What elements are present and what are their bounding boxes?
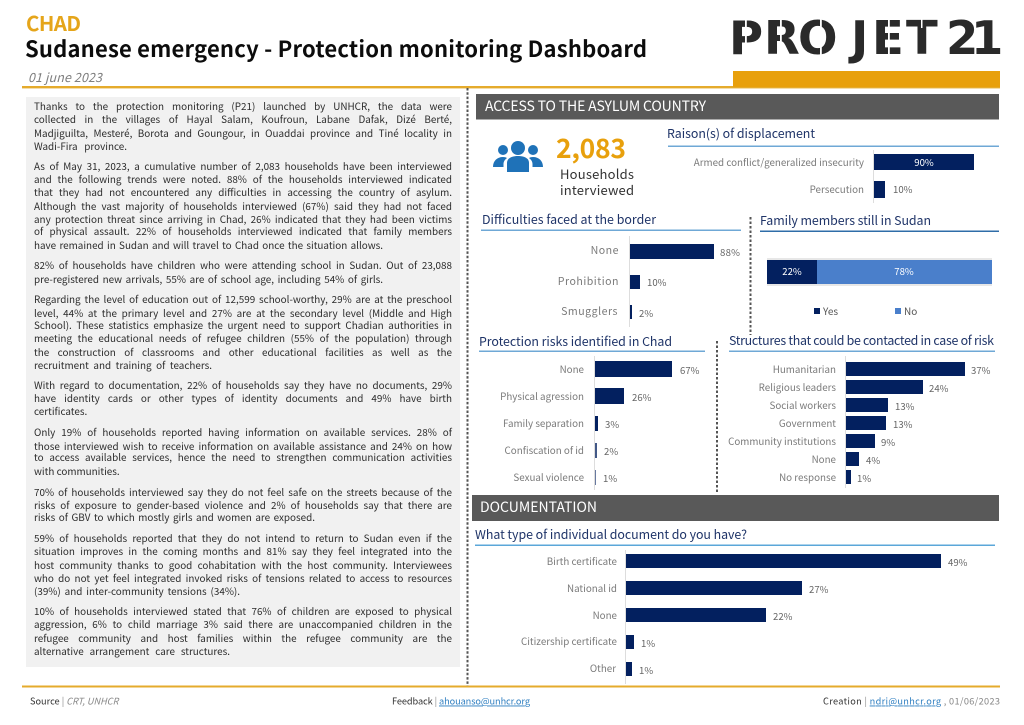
paragraph: education level: meeting the educational needs of refugee children (55% of the population) through bbox=[34, 331, 452, 345]
chart: family members still in Sudan: 78% bbox=[894, 264, 914, 278]
paragraph: cumulative trends: and the following trends were noted. 88% of the households interviewed indicated bbox=[34, 172, 452, 186]
chart: difficulties faced at the border: 88% bbox=[720, 245, 740, 259]
chart: individual documents: Citizership certificate bbox=[521, 634, 618, 648]
chart: reasons for displacement: Armed conflict/generalized insecurity bbox=[694, 155, 864, 169]
paragraph: information on services: with communities. bbox=[34, 464, 120, 478]
chart: reasons for displacement bbox=[667, 124, 999, 203]
chart: individual documents: 22% bbox=[773, 609, 793, 623]
chart title: Difficulties faced at the border bbox=[482, 210, 656, 228]
paragraph: cumulative trends: any protection threat since arriving in Chad, 26% indicated that they had been victims bbox=[34, 212, 452, 226]
paragraph: school attendance: 82% of households have children who were attending school in Sudan. Out of 23,088 bbox=[34, 258, 452, 272]
paragraph: documentation: With regard to documentation, 22% of households say they have no documents, 29% bbox=[34, 378, 452, 392]
paragraph: documentation: certificates. bbox=[34, 404, 87, 418]
chart: protection risks identified in Chad: 26% bbox=[632, 390, 652, 404]
chart: structures that could be contacted in case of risk: No response bbox=[779, 470, 837, 484]
chart title: What type of individual document do you have? bbox=[475, 525, 747, 543]
chart: structures that could be contacted in case of risk: None bbox=[812, 452, 837, 466]
chart title: Raison(s) of displacement bbox=[667, 124, 815, 142]
paragraph: cumulative trends: Although the vast majority of households interviewed (67%) said they had not faced bbox=[34, 199, 452, 213]
paragraph: introduction bbox=[34, 99, 452, 153]
chart: difficulties faced at the border: Prohibition bbox=[558, 274, 619, 289]
key figure: households interviewed bbox=[556, 127, 634, 199]
title block bbox=[25, 7, 647, 86]
footer: feedback: Feedback | ahouanso@unhcr.org bbox=[392, 694, 531, 708]
paragraph: safety: risks of GBV to which mostly girls and women are exposed. bbox=[34, 510, 315, 524]
chart: difficulties faced at the border: Smugglers bbox=[561, 304, 618, 319]
paragraph: cumulative trends: As of May 31, 2023, a cumulative number of 2,083 households have been interviewed bbox=[34, 159, 452, 173]
paragraph: return intentions: situation improves in the coming months and 81% say they feel integrated into the bbox=[34, 544, 452, 558]
chart: individual documents: 27% bbox=[809, 582, 829, 596]
section header: access to the asylum country: ACCESS TO THE ASYLUM COUNTRY bbox=[485, 96, 707, 116]
chart: structures that could be contacted in case of risk: 1% bbox=[857, 471, 871, 485]
footer: creation: Creation | ndri@unhcr.org , 01/06/2023 bbox=[823, 694, 1000, 708]
chart: protection risks identified in Chad: 3% bbox=[605, 417, 619, 431]
paragraph: safety: 70% of households interviewed say they do not feel safe on the streets because of the bbox=[34, 485, 452, 499]
chart: protection risks identified in Chad: None bbox=[560, 362, 585, 376]
chart title: Family members still in Sudan bbox=[760, 211, 931, 229]
key figure: households interviewed: Households bbox=[560, 164, 634, 183]
chart: reasons for displacement: 10% bbox=[893, 182, 913, 196]
chart: structures that could be contacted in case of risk: 13% bbox=[895, 399, 915, 413]
key figure: households interviewed: interviewed bbox=[560, 180, 634, 199]
section header: documentation: DOCUMENTATION bbox=[480, 497, 597, 517]
paragraph: cumulative trends: have remained in Sudan and will travel to Chad once the situation allows. bbox=[34, 238, 383, 252]
country heading: CHAD bbox=[26, 7, 81, 37]
chart: individual documents: National id bbox=[567, 581, 617, 595]
paragraph: information on services: Only 19% of households reported having information on available services. 28% of bbox=[34, 425, 452, 439]
paragraph: cumulative trends bbox=[34, 159, 452, 252]
chart: structures that could be contacted in case of risk: 24% bbox=[929, 381, 949, 395]
paragraph: information on services: those interviewed wish to receive information on available assistance and 24% on how bbox=[34, 439, 452, 453]
icon: group of people bbox=[493, 141, 543, 172]
chart: family members still in Sudan bbox=[760, 211, 999, 318]
chart: structures that could be contacted in case of risk: 13% bbox=[893, 417, 913, 431]
paragraph: return intentions: (39%) and inter-community tensions (34%). bbox=[34, 584, 240, 598]
chart title: Structures that could be contacted in case of risk bbox=[729, 331, 994, 349]
footer: source: Source | CRT, UNHCR bbox=[30, 694, 120, 708]
date: 01 june 2023 bbox=[28, 67, 103, 86]
chart: protection risks identified in Chad: 67% bbox=[680, 363, 700, 377]
chart: structures that could be contacted in case of risk: Community institutions bbox=[728, 434, 836, 448]
paragraph: education level bbox=[34, 292, 452, 372]
chart: family members still in Sudan: 22% bbox=[782, 264, 802, 278]
paragraph: return intentions: 59% of households reported that they do not intend to return to Sudan even if the bbox=[34, 531, 452, 545]
chart: individual documents: 1% bbox=[641, 636, 655, 650]
paragraph: introduction: Madjiguilta, Mesteré, Borota and Goungour, in Ouaddai province and Tiné locality in bbox=[34, 126, 452, 140]
orange accent bar bbox=[733, 71, 1000, 87]
chart: individual documents bbox=[475, 525, 995, 684]
paragraph: children: alternative arrangement care structures. bbox=[34, 644, 230, 658]
paragraph: education level: level, 44% at the primary level and 27% are at the secondary level (Middle and High bbox=[34, 306, 452, 320]
paragraph: children: refugee community and host families within the refugee community are the bbox=[34, 631, 452, 645]
paragraph: return intentions bbox=[34, 531, 452, 598]
chart: individual documents: Other bbox=[590, 661, 616, 675]
paragraph: information on services: to access available services, hence the need to strengthen communication activities bbox=[34, 450, 452, 464]
paragraph: education level: Regarding the level of education out of 12,599 school-worthy, 29% are at the preschool bbox=[34, 292, 452, 306]
paragraph: documentation: have identity cards or other types of identity documents and 49% have birth bbox=[34, 391, 452, 405]
chart: structures that could be contacted in case of risk: Social workers bbox=[769, 398, 836, 412]
chart: protection risks identified in Chad: Family separation bbox=[503, 416, 584, 430]
paragraph: education level: the construction of classrooms and other educational facilities as well as the bbox=[34, 345, 452, 359]
chart: protection risks identified in Chad: Confiscation of id bbox=[505, 443, 584, 457]
chart: difficulties faced at the border: None bbox=[591, 243, 619, 258]
paragraph: information on services bbox=[34, 425, 452, 478]
paragraph: introduction: Thanks to the protection monitoring (P21) launched by UNHCR, the data were bbox=[34, 99, 452, 113]
legend: No bbox=[904, 303, 917, 318]
chart: structures that could be contacted in case of risk: 9% bbox=[881, 435, 895, 449]
dashboard title: Sudanese emergency - Protection monitoring Dashboard bbox=[25, 32, 647, 64]
legend: Yes bbox=[822, 303, 838, 318]
paragraph: introduction: Wadi-Fira province. bbox=[34, 139, 127, 153]
legend bbox=[814, 303, 917, 318]
paragraph: safety: risks of exposure to gender-based violence and 2% of households say that there are bbox=[34, 498, 452, 512]
chart: protection risks identified in Chad: Sexual violence bbox=[513, 470, 585, 484]
key figure: households interviewed: 2,083 bbox=[556, 127, 626, 166]
paragraph: children bbox=[34, 604, 452, 658]
section header: documentation bbox=[472, 495, 999, 521]
chart: reasons for displacement: 90% bbox=[914, 155, 934, 169]
chart: individual documents: Birth certificate bbox=[547, 554, 618, 568]
section header: access to the asylum country bbox=[476, 94, 999, 120]
chart title: Protection risks identified in Chad bbox=[479, 332, 672, 350]
chart: difficulties faced at the border: 10% bbox=[647, 275, 667, 289]
chart: structures that could be contacted in case of risk: 4% bbox=[866, 453, 880, 467]
logo: PROJET 21: PROJET21 bbox=[729, 11, 1003, 65]
paragraph: introduction: collected in the villages of Hayal Salam, Koufroun, Labane Dafak, Dizé Berté, bbox=[34, 112, 452, 126]
paragraph: education level: recruitment and training of teachers. bbox=[34, 358, 212, 372]
chart: structures that could be contacted in case of risk: Government bbox=[779, 416, 836, 430]
chart: structures that could be contacted in case of risk: Religious leaders bbox=[759, 380, 836, 394]
chart: difficulties faced at the border: 2% bbox=[639, 306, 653, 320]
paragraph: documentation bbox=[34, 378, 452, 418]
chart: individual documents: 49% bbox=[948, 555, 968, 569]
paragraph: school attendance bbox=[34, 258, 452, 286]
chart: structures that could be contacted in case of risk: Humanitarian bbox=[773, 362, 836, 376]
chart: individual documents: None bbox=[593, 608, 618, 622]
paragraph: children: aggression, 6% to child marriage 3% said there are unaccompanied children in the bbox=[34, 617, 452, 631]
paragraph: return intentions: who do not yet feel integrated invoked risks of tensions related to access to resources bbox=[34, 571, 452, 585]
paragraph: cumulative trends: that they had not encountered any difficulties in accessing the country of asylum. bbox=[34, 185, 452, 199]
chart: structures that could be contacted in case of risk bbox=[728, 331, 995, 488]
paragraph: education level: School). These statistics emphasize the urgent need to support Chadian authorities in bbox=[34, 318, 452, 332]
chart: protection risks identified in Chad: 1% bbox=[603, 471, 617, 485]
decorative rules bbox=[22, 86, 1000, 88]
paragraph: cumulative trends: of physical assault. 22% of households interviewed indicated that family members bbox=[34, 224, 452, 238]
chart: protection risks identified in Chad bbox=[479, 332, 705, 490]
chart: individual documents: 1% bbox=[639, 663, 653, 677]
chart: difficulties faced at the border bbox=[481, 210, 741, 327]
chart: protection risks identified in Chad: Physical agression bbox=[500, 389, 584, 403]
paragraph: return intentions: host community thanks to good cohabitation with the host community. Interviewees bbox=[34, 558, 452, 572]
paragraph: safety bbox=[34, 485, 452, 524]
paragraph: children: 10% of households interviewed stated that 76% of children are exposed to physical bbox=[34, 604, 452, 618]
chart: protection risks identified in Chad: 2% bbox=[604, 444, 618, 458]
chart: reasons for displacement: Persecution bbox=[810, 182, 864, 196]
chart: structures that could be contacted in case of risk: 37% bbox=[971, 363, 991, 377]
paragraph: school attendance: pre-registered new arrivals, 55% are of school age, including 54% of girls. bbox=[34, 272, 383, 286]
panel: narrative text bbox=[26, 97, 460, 667]
